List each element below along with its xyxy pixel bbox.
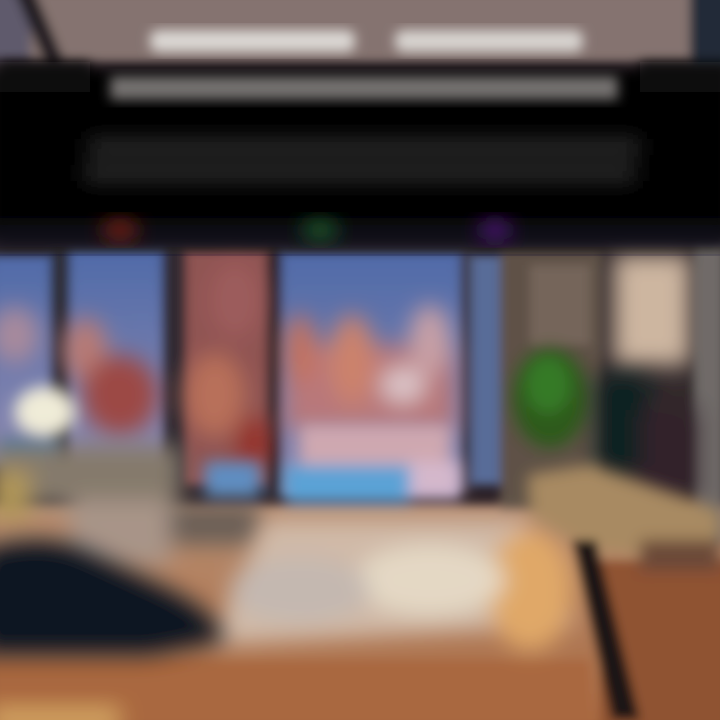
plant [512, 348, 588, 448]
description text bars [84, 138, 640, 182]
city buildings [0, 260, 455, 465]
band shadow [0, 225, 720, 247]
icon: lamp glow [15, 387, 75, 437]
windows and city view [0, 245, 500, 497]
dark chair [598, 375, 695, 500]
title bar [150, 30, 583, 52]
wall and artwork [500, 245, 720, 545]
floor [0, 505, 720, 720]
ceiling [0, 0, 720, 70]
black text band [0, 62, 720, 238]
side furniture and cushions [0, 445, 260, 565]
subtitle bar [110, 76, 618, 100]
rug [210, 520, 575, 650]
coloured glints under band [102, 220, 511, 240]
water reflection [0, 425, 460, 503]
dark sofa [0, 540, 225, 655]
wooden table [528, 465, 720, 570]
floor glow [0, 705, 120, 720]
table leg [572, 540, 640, 720]
